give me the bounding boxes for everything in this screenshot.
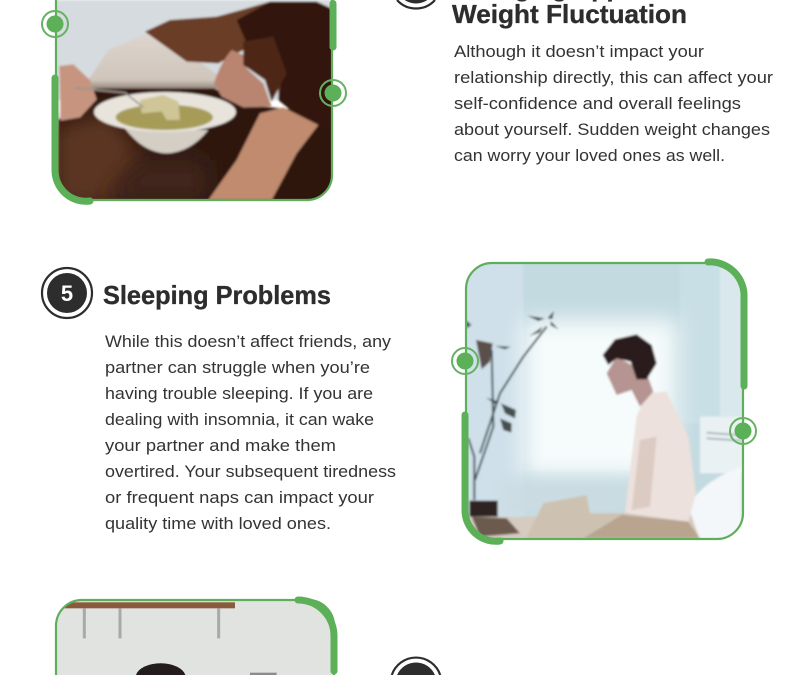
text block: sleeping problems description: [105, 332, 396, 533]
accent: lower left corner: [465, 415, 500, 541]
text block: weight fluctuation description: Although it doesn’t impact your: [454, 42, 704, 61]
panel: partly visible lower photo: [50, 597, 343, 675]
marker: right node: [320, 80, 346, 106]
heading: Sleeping Problems: Sleeping Problems: [103, 280, 331, 310]
marker: right node: [730, 418, 756, 444]
text block: sleeping problems description: While this doesn’t affect friends, any: [105, 332, 392, 351]
accent: upper right corner: [298, 600, 334, 671]
badge: number 5: 5: [61, 281, 73, 306]
badge: number 4: [397, 0, 435, 8]
panel: photo woman sitting on bed: [452, 260, 756, 543]
accent: right edge bar: [330, 4, 336, 47]
accent: lower left corner: [55, 78, 90, 201]
text block: sleeping problems description: your partner and make them: [105, 436, 336, 455]
text block: sleeping problems description: overtired. Your subsequent tiredness: [105, 462, 396, 481]
text block: weight fluctuation description: can worry your loved ones as well.: [454, 146, 725, 165]
text block: sleeping problems description: dealing with insomnia, it can wake: [105, 410, 374, 429]
text block: sleeping problems description: or frequent naps can impact your: [105, 488, 374, 507]
photo: wall with shelf and head: [57, 601, 333, 675]
frame: photo outline: [56, 600, 334, 675]
accent: upper right corner: [708, 262, 744, 386]
photo: woman and soup: [53, 0, 337, 207]
text block: weight fluctuation description: [454, 42, 773, 165]
photo: woman on bed with plant: [460, 260, 750, 543]
text block: sleeping problems description: having trouble sleeping. If you are: [105, 384, 373, 403]
badge: number 5: [42, 268, 92, 318]
marker: left node: [452, 348, 478, 374]
text block: weight fluctuation description: self-confidence and overall feelings: [454, 94, 741, 113]
frame: photo outline: [466, 263, 743, 539]
text block: weight fluctuation description: about yourself. Sudden weight changes: [454, 120, 770, 139]
text block: sleeping problems description: quality time with loved ones.: [105, 514, 331, 533]
text block: sleeping problems description: partner can struggle when you’re: [105, 358, 370, 377]
panel: photo woman asleep over soup bowl: [42, 0, 346, 207]
badge: number 6: [392, 658, 440, 675]
marker: left node: [42, 11, 68, 37]
frame: photo outline: [56, 0, 332, 200]
text block: weight fluctuation description: relationship directly, this can affect your: [454, 68, 773, 87]
